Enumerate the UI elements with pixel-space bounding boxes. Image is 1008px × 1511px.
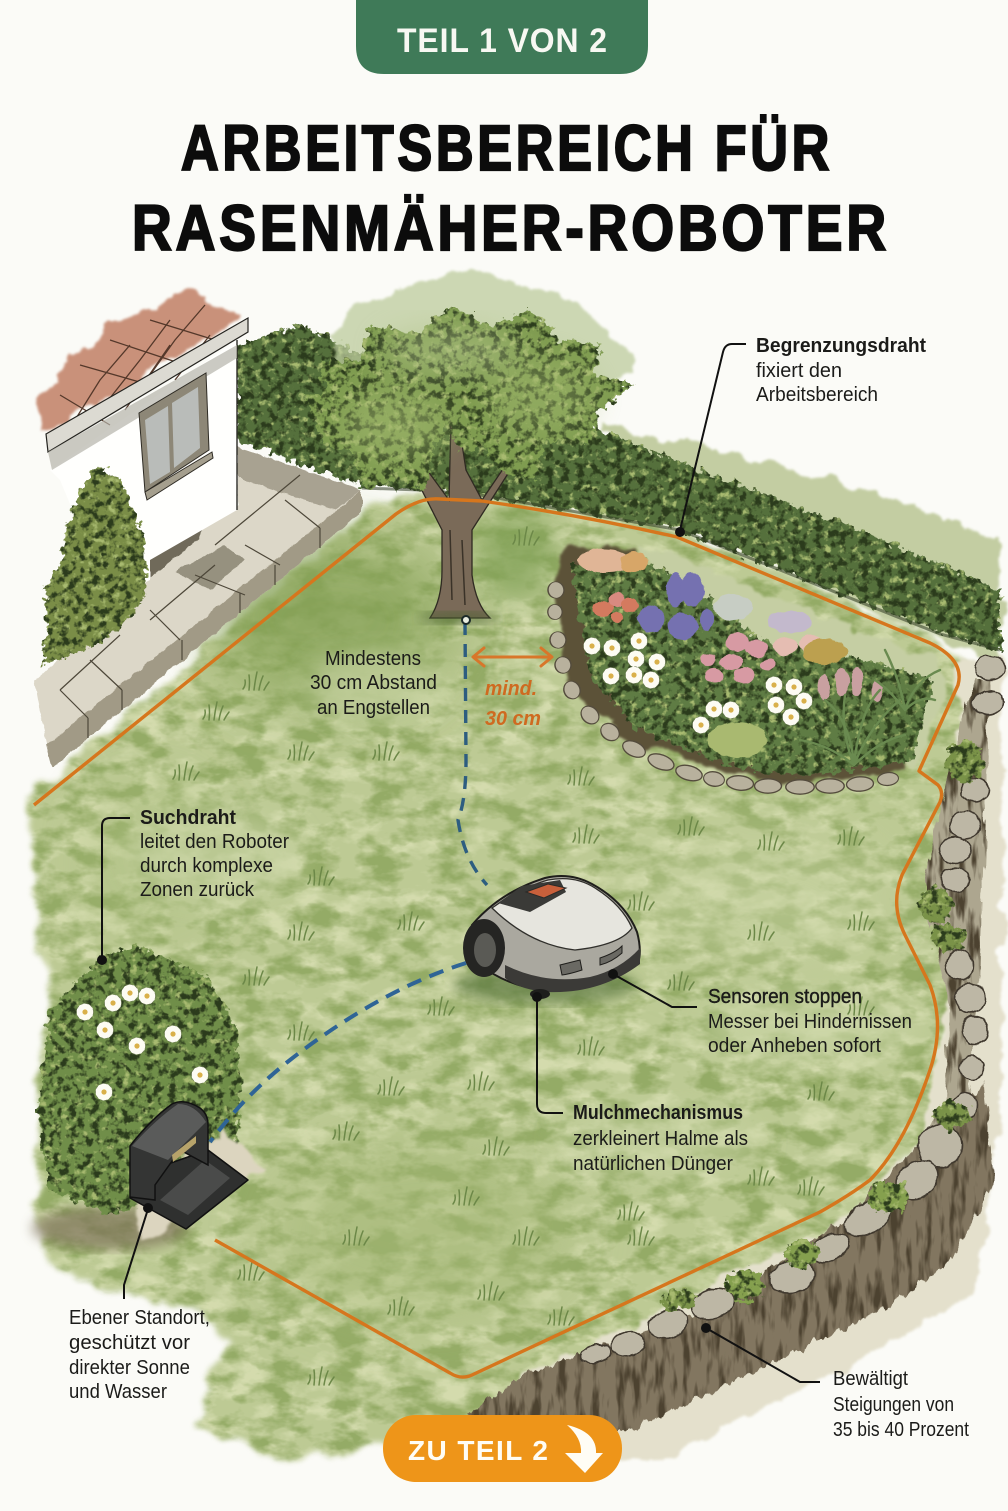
button: next part	[383, 1415, 622, 1482]
icon: curved arrow	[565, 1425, 603, 1473]
callout: minimum distance	[310, 647, 437, 719]
charging station	[130, 1102, 265, 1240]
orange control panel	[526, 884, 566, 898]
title: RASENMÄHER-ROBOTER	[132, 192, 890, 264]
callout: boundary wire: fixiert den	[756, 359, 842, 382]
callout: guide wire: Suchdraht	[140, 806, 236, 829]
bed soil and foliage	[553, 545, 906, 783]
daisies	[584, 632, 812, 734]
callout: minimum distance: 30 cm Abstand	[310, 671, 437, 694]
boundary plants	[662, 742, 985, 1310]
callout: slope	[701, 1323, 969, 1441]
callout: mulching	[532, 992, 748, 1175]
search wire marker	[462, 616, 470, 624]
house wall	[50, 340, 237, 600]
callout: boundary wire	[675, 334, 926, 537]
search wire to tree	[458, 622, 487, 885]
hedge	[237, 325, 1000, 660]
tab: part indicator: TEIL 1 VON 2	[397, 22, 608, 60]
bed edging stones	[547, 580, 899, 794]
callout: slope: 35 bis 40 Prozent	[833, 1418, 969, 1441]
mower wheel	[463, 919, 550, 999]
callout: guide wire: leitet den Roboter	[140, 830, 289, 853]
title	[132, 112, 890, 264]
callout: mulching: Mulchmechanismus	[573, 1101, 743, 1124]
callout: slope: Bewältigt	[833, 1367, 908, 1390]
callout: sensors: oder Anheben sofort	[708, 1034, 881, 1057]
distance label	[485, 678, 541, 730]
house	[38, 290, 248, 665]
garden illustration	[28, 272, 1005, 1463]
callout: guide wire	[97, 806, 289, 965]
flower clusters	[578, 549, 883, 758]
callout: guide wire: Zonen zurück	[140, 878, 255, 901]
callout: mulching: natürlichen Dünger	[573, 1152, 733, 1175]
long leaves	[800, 650, 940, 765]
boundary wire	[34, 499, 959, 1377]
tab: part indicator	[356, 0, 648, 74]
mower sensor vents	[560, 946, 622, 975]
roof	[38, 290, 248, 470]
trunk	[404, 418, 509, 618]
shrub by house	[42, 465, 146, 665]
tree	[305, 272, 635, 624]
callout: dock location: geschützt vor	[69, 1331, 190, 1354]
callout: sensors: Sensoren stoppen	[708, 985, 862, 1008]
bush with blossoms	[32, 945, 240, 1250]
callout: mulching: zerkleinert Halme als	[573, 1127, 748, 1150]
callout: boundary wire: Arbeitsbereich	[756, 383, 878, 406]
mower skirt	[505, 948, 640, 992]
mower lid	[492, 879, 632, 950]
callout: dock location: und Wasser	[69, 1380, 167, 1403]
distance arrow	[473, 648, 552, 666]
grass tufts	[173, 527, 874, 1385]
lawn	[28, 490, 985, 1458]
callout: sensors: Messer bei Hindernissen	[708, 1010, 912, 1033]
robotic mower	[453, 876, 640, 1004]
callout: dock location: Ebener Standort,	[69, 1306, 210, 1329]
dock pad	[130, 1130, 265, 1240]
distance label: mind.	[485, 678, 537, 700]
button: next part: ZU TEIL 2	[408, 1435, 548, 1466]
pale grass behind bed	[640, 545, 947, 770]
search wire to charging station	[210, 963, 466, 1142]
paved garden path	[35, 447, 362, 768]
canopy	[305, 272, 635, 490]
callout: sensors	[608, 969, 912, 1057]
callout: minimum distance: Mindestens	[325, 647, 421, 670]
distance label: 30 cm	[485, 708, 541, 730]
callout: minimum distance: an Engstellen	[317, 696, 430, 719]
flower bed	[547, 545, 947, 794]
callout: dock location: direkter Sonne	[69, 1356, 190, 1379]
callout: boundary wire: Begrenzungsdraht	[756, 334, 926, 357]
window	[139, 373, 213, 500]
mower body	[472, 876, 640, 990]
callout: slope: Steigungen von	[833, 1393, 954, 1416]
callout: dock location	[69, 1203, 210, 1403]
dock tower	[130, 1102, 208, 1200]
title: ARBEITSBEREICH FÜR	[181, 112, 833, 184]
dock base plate	[130, 1150, 248, 1229]
boundary stones	[580, 656, 1005, 1365]
slope soil	[468, 655, 1002, 1463]
callout: guide wire: durch komplexe	[140, 854, 273, 877]
